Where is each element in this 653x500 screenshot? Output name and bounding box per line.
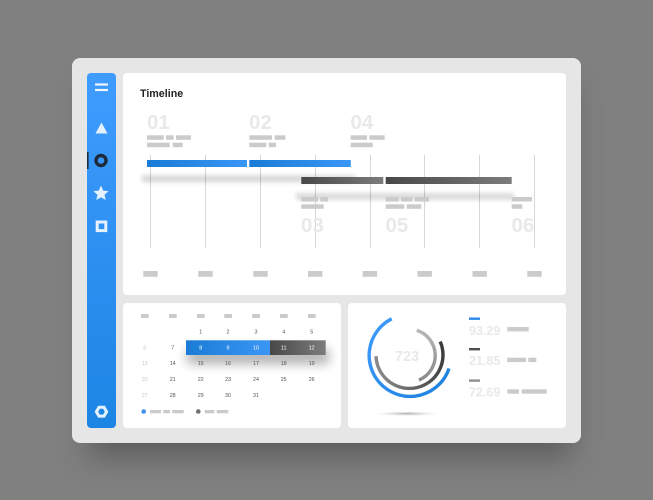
calendar dates <box>142 330 315 399</box>
calendar dates: 14 <box>170 361 176 367</box>
milestone 04: 04 <box>350 111 374 134</box>
panel: donut stats <box>348 303 566 428</box>
stat 1 <box>469 318 529 338</box>
calendar dates: 2 <box>226 330 230 336</box>
calendar dates: 30 <box>225 393 231 399</box>
calendar dates: 12 <box>309 346 315 352</box>
milestone 02: 02 <box>249 111 272 134</box>
stat 1: 93.29 <box>469 324 500 338</box>
calendar dates: 22 <box>198 377 204 383</box>
calendar dates: 3 <box>254 330 258 336</box>
calendar dates: 11 <box>281 346 287 352</box>
icon: circle <box>96 156 106 166</box>
milestone 02 <box>249 111 285 147</box>
radial chart <box>369 319 449 396</box>
highlight shadow <box>187 349 329 364</box>
blue bars <box>147 160 351 167</box>
dashboard frame <box>72 58 581 443</box>
milestone 06 <box>512 197 534 237</box>
calendar dates: 6 <box>143 346 146 352</box>
calendar dates: 10 <box>253 346 259 352</box>
calendar dates: 18 <box>281 361 287 367</box>
milestone 05 <box>386 197 429 237</box>
calendar dates: 21 <box>170 377 176 383</box>
ground shadow <box>370 411 444 417</box>
milestone 03 <box>301 197 328 237</box>
dashboard shadow <box>88 85 572 457</box>
calendar dates: 26 <box>309 377 315 383</box>
sidebar <box>87 73 116 428</box>
milestone 03: 03 <box>301 214 324 237</box>
active indicator <box>87 152 89 169</box>
milestone 04 <box>350 111 385 147</box>
calendar dates: 29 <box>198 393 204 399</box>
panel: timeline <box>123 73 566 295</box>
milestone 01 <box>147 111 191 147</box>
icon: hexagon <box>96 407 107 416</box>
calendar dates: 1 <box>199 330 202 336</box>
calendar dates: 16 <box>225 361 231 367</box>
stat 3: 72.69 <box>469 386 500 400</box>
calendar dates: 24 <box>253 377 259 383</box>
stat 2 <box>469 348 536 368</box>
stat 3 <box>469 379 547 400</box>
calendar legend <box>141 409 228 414</box>
icon: star <box>93 186 109 200</box>
icon: square <box>97 222 106 231</box>
bar shadows <box>142 175 514 200</box>
highlight blue range <box>186 340 270 355</box>
milestone 01: 01 <box>147 111 170 134</box>
calendar dates: 17 <box>253 361 259 367</box>
icon: menu <box>95 83 108 91</box>
calendar dates: 19 <box>309 361 315 367</box>
stat 2: 21.85 <box>469 354 500 368</box>
calendar dates: 31 <box>253 393 259 399</box>
calendar dates: 7 <box>171 346 174 352</box>
panel: calendar <box>123 303 341 428</box>
axis labels <box>143 271 542 277</box>
calendar dates: 13 <box>142 361 148 367</box>
center value: 723 <box>395 349 419 365</box>
dark bars <box>301 177 512 184</box>
icon: triangle <box>96 122 108 134</box>
milestone 05: 05 <box>386 214 408 237</box>
calendar dates: 8 <box>199 346 202 352</box>
calendar dates: 23 <box>225 377 231 383</box>
weekday headers <box>141 314 316 318</box>
highlight dark range <box>270 340 326 355</box>
calendar dates: 15 <box>198 361 204 367</box>
calendar dates: 20 <box>142 377 148 383</box>
calendar dates: 9 <box>226 346 230 352</box>
calendar dates: 5 <box>310 330 313 336</box>
calendar dates: 25 <box>281 377 287 383</box>
calendar dates: 27 <box>142 393 148 399</box>
calendar dates: 28 <box>170 393 176 399</box>
milestone 06: 06 <box>512 214 534 237</box>
title: Timeline <box>140 88 183 100</box>
calendar dates: 4 <box>282 330 285 336</box>
